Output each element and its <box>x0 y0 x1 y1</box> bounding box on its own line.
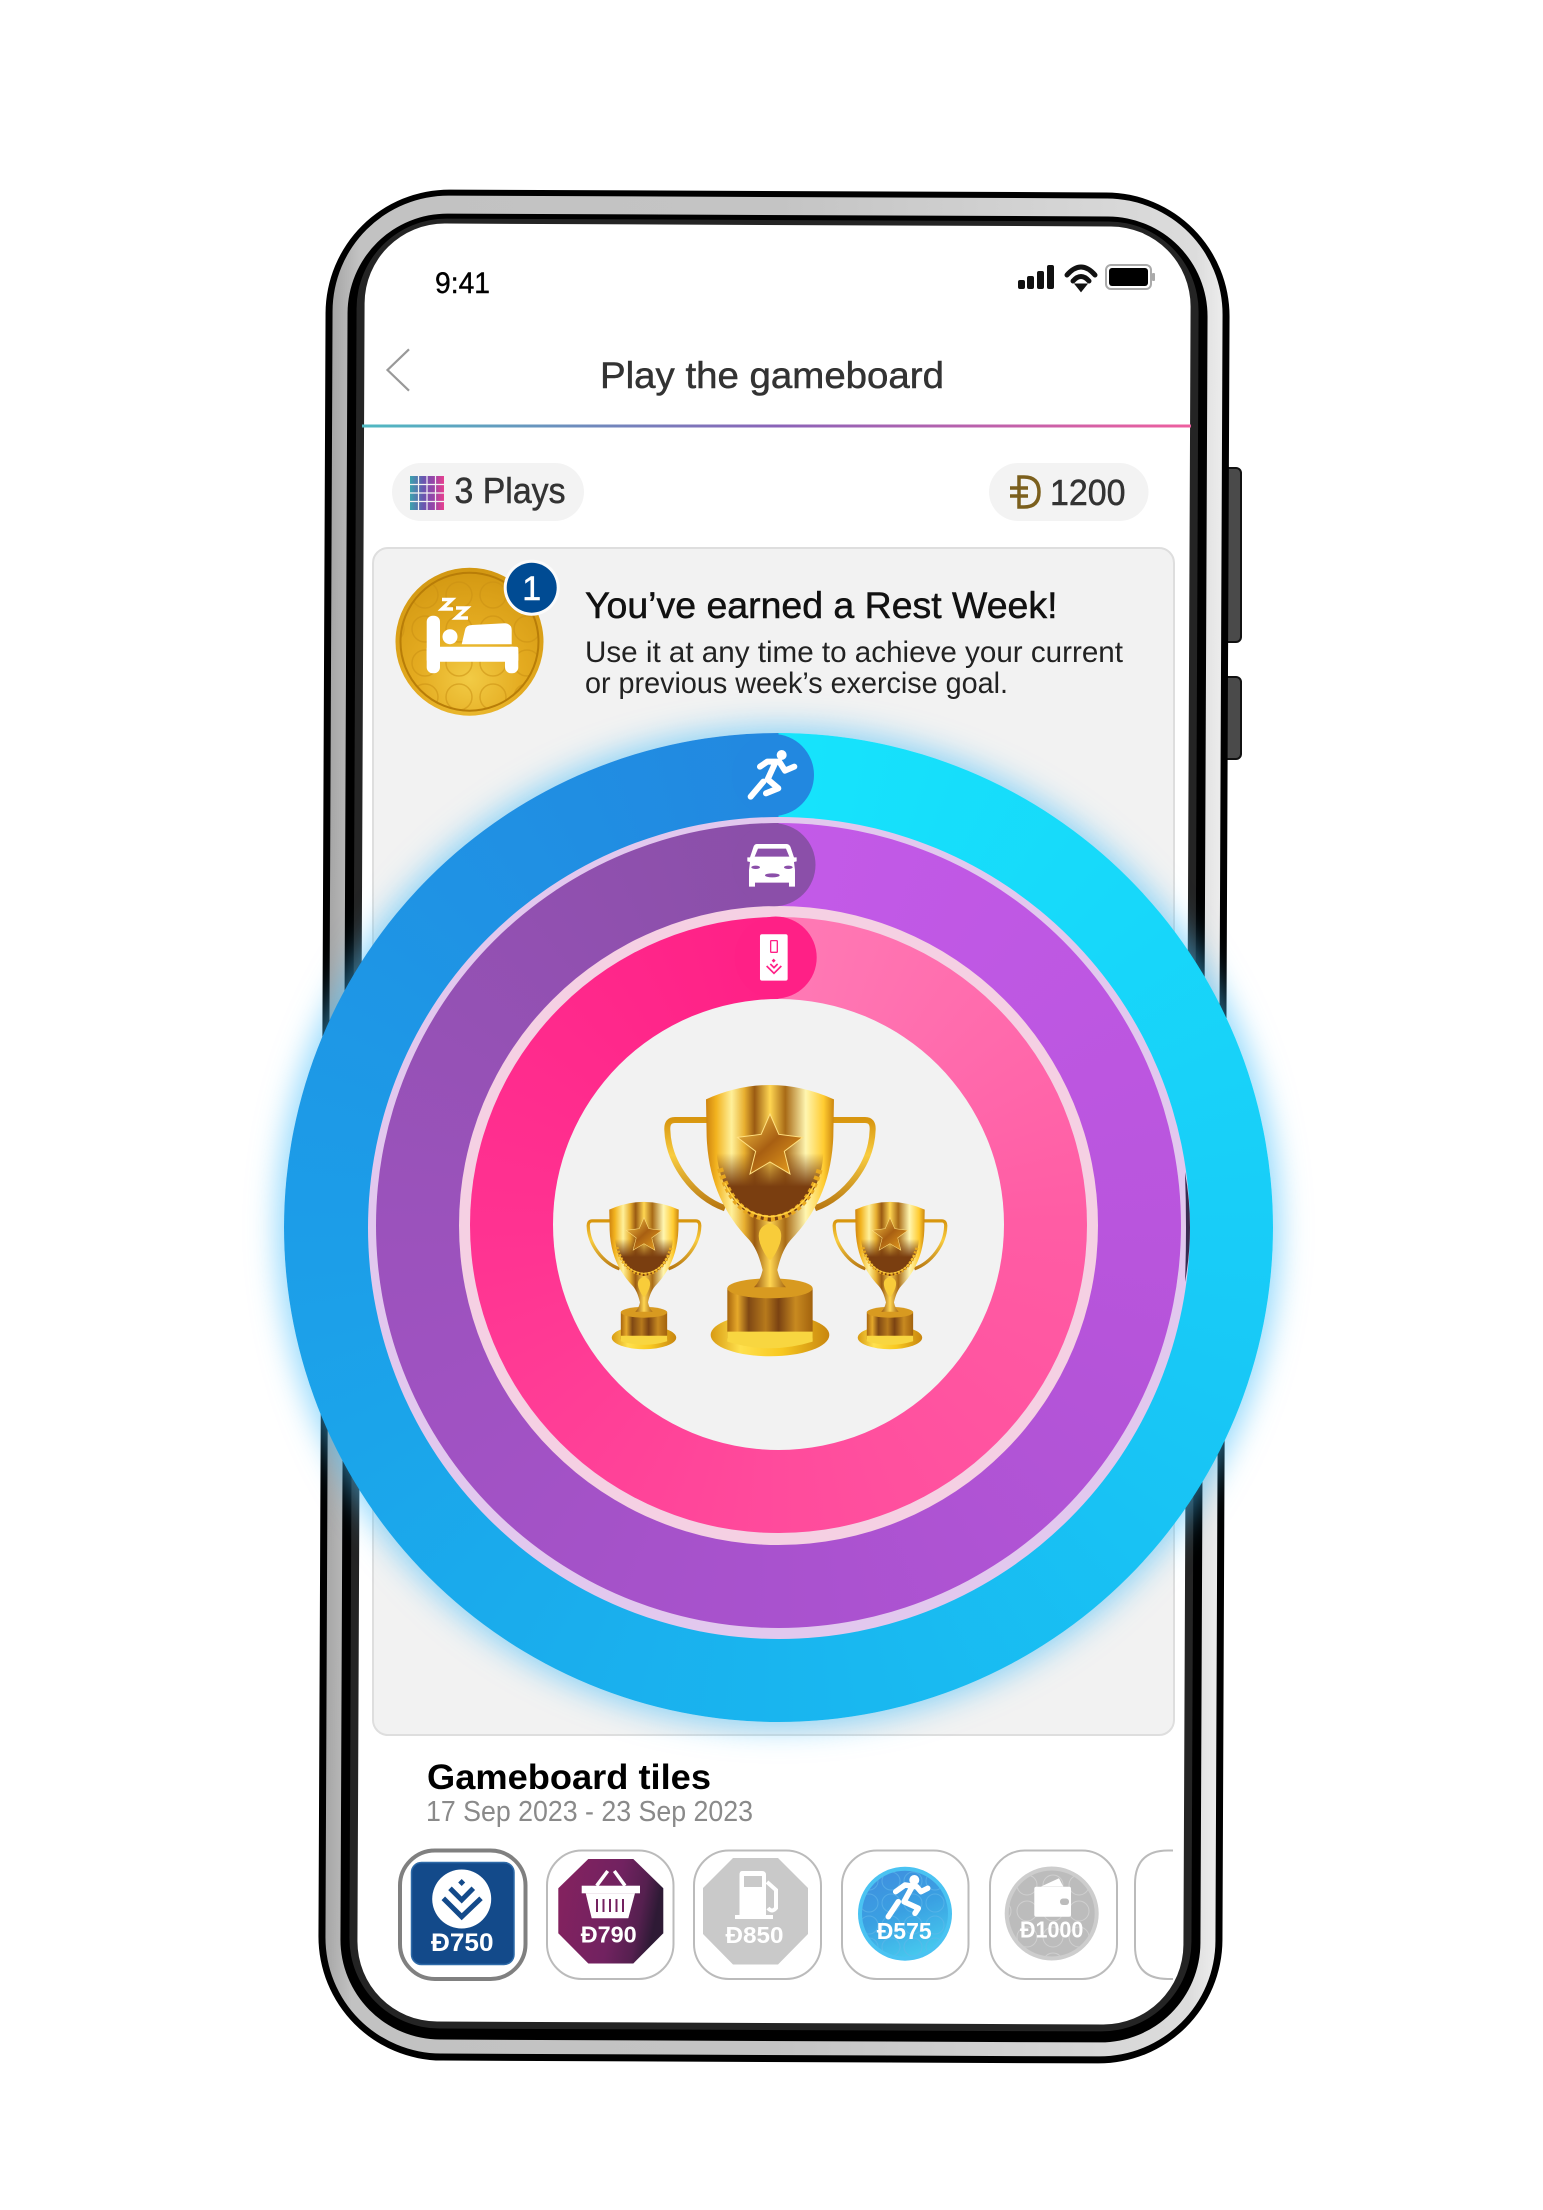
status time: 9:41 <box>435 267 490 300</box>
ring: exercise (blue) with glow <box>284 733 1273 1722</box>
trophy: right <box>834 1202 946 1349</box>
ring: shopping (pink) <box>470 917 1087 1533</box>
points pill <box>989 463 1148 521</box>
panel: gameboard card <box>373 548 1174 1735</box>
icon: runner <box>751 750 794 797</box>
tile 3: 850 points <box>694 1850 821 1979</box>
points balance: 1200 <box>1050 472 1126 513</box>
icon: cellular signal <box>1018 265 1054 289</box>
ring cap: exercise <box>732 734 814 816</box>
ring separator <box>368 816 1190 1638</box>
back arrow <box>388 349 409 391</box>
progress rings <box>258 706 1300 1748</box>
tiles heading: Gameboard tiles <box>427 1758 711 1797</box>
plays count: 3 Plays <box>454 470 566 511</box>
tile 2: 790 points <box>547 1850 674 1979</box>
icon: phone card <box>760 934 788 981</box>
tile 6: clipped <box>1135 1850 1173 1979</box>
plays pill <box>392 463 584 521</box>
header rule <box>362 424 1191 428</box>
icon: car <box>747 844 797 887</box>
rest week heading: You’ve earned a Rest Week! <box>585 585 1058 626</box>
tile 1: 750 points: Ð750 <box>431 1929 494 1957</box>
tiles date range: 17 Sep 2023 - 23 Sep 2023 <box>426 1796 753 1828</box>
trophy: centre <box>667 1085 873 1356</box>
rest week description: Use it at any time to achieve your current <box>585 636 1124 669</box>
icon: points currency <box>1010 477 1039 507</box>
rest week count badge: 1 <box>522 570 541 608</box>
icon: rest week coin <box>396 568 544 716</box>
ring separator <box>458 906 1098 1545</box>
centre disc <box>552 998 1004 1450</box>
tile 3: 850 points: Ð850 <box>726 1922 784 1948</box>
trophy: left <box>588 1202 700 1349</box>
screen title: Play the gameboard <box>600 355 944 396</box>
tile 1: 750 points <box>400 1850 526 1979</box>
icon: side buttons <box>1215 468 1241 759</box>
tile 4: 575 points <box>842 1850 968 1979</box>
tile 4: 575 points: Ð575 <box>877 1918 932 1944</box>
icon: tile grid <box>410 476 444 510</box>
rest week description <box>585 636 1124 700</box>
tile 2: 790 points: Ð790 <box>581 1921 637 1947</box>
rest week description: or previous week’s exercise goal. <box>585 667 1008 700</box>
phone frame <box>318 189 1230 2064</box>
app screen background <box>357 223 1191 2025</box>
ring: driving (purple) <box>376 823 1181 1628</box>
icon: wifi <box>1067 267 1095 290</box>
rest week count badge <box>504 560 560 616</box>
ring cap: shopping <box>735 916 817 998</box>
tile 5: 1000 points: Ð1000 <box>1020 1917 1083 1943</box>
tile 5: 1000 points <box>990 1850 1117 1979</box>
icon: battery <box>1106 265 1155 289</box>
phone bezel sliver between rings <box>1185 1172 1190 1282</box>
ring cap: driving <box>732 823 816 906</box>
